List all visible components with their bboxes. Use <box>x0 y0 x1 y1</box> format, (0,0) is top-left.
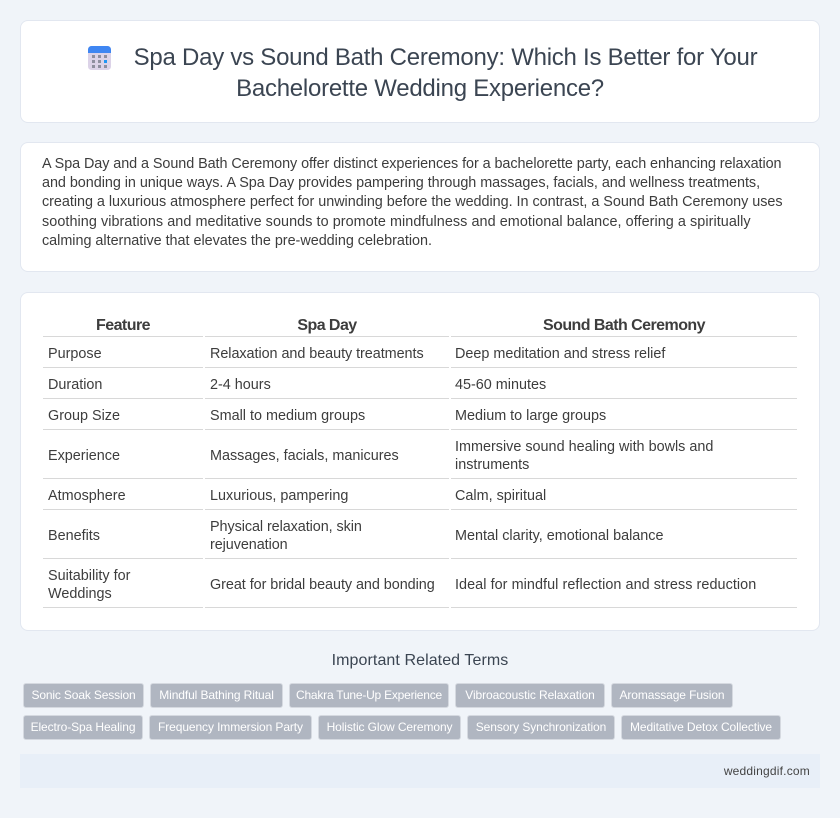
row: benefits: Benefits <box>48 528 100 544</box>
tag <box>23 683 144 708</box>
text block: introduction: and bonding in unique ways. A Spa Day provides pampering through massages, facials, and wellness treatments, <box>42 175 760 191</box>
text block: introduction <box>42 156 783 249</box>
row: group size: Group Size <box>48 408 120 424</box>
row: experience: Experience <box>48 448 120 464</box>
row: benefits: Mental clarity, emotional balance <box>455 528 664 544</box>
row: purpose: Purpose <box>48 346 102 362</box>
row: experience <box>48 439 713 473</box>
table header: Feature <box>96 317 150 334</box>
tag <box>318 715 461 740</box>
tag: Frequency Immersion Party <box>158 720 303 734</box>
row: atmosphere <box>48 488 546 504</box>
row: group size: Small to medium groups <box>210 408 365 424</box>
row: suitability for weddings: Suitability for <box>48 568 130 584</box>
row: group size: Medium to large groups <box>455 408 606 424</box>
row: atmosphere: Atmosphere <box>48 488 126 504</box>
heading: important related terms: Important Related Terms <box>332 652 508 669</box>
panel: title card <box>20 20 820 123</box>
table header: Sound Bath Ceremony <box>543 317 705 334</box>
tag: Sensory Synchronization <box>476 720 606 734</box>
row: duration: 45-60 minutes <box>455 377 546 393</box>
footer bar <box>20 754 820 788</box>
row: duration: Duration <box>48 377 102 393</box>
tag <box>611 683 733 708</box>
row: purpose: Deep meditation and stress relief <box>455 346 665 362</box>
row: suitability for weddings: Ideal for mindful reflection and stress reduction <box>455 577 756 593</box>
tag <box>150 683 283 708</box>
tag: Mindful Bathing Ritual <box>159 688 274 702</box>
row: benefits: Physical relaxation, skin <box>210 519 362 535</box>
title: Spa Day vs Sound Bath Ceremony: Which Is Better for Your <box>134 44 757 71</box>
row: purpose: Relaxation and beauty treatments <box>210 346 424 362</box>
row: benefits: rejuvenation <box>210 537 288 553</box>
tag <box>455 683 605 708</box>
row: atmosphere: Luxurious, pampering <box>210 488 348 504</box>
tag <box>289 683 449 708</box>
footer source: weddingdif.com <box>724 764 810 778</box>
text block: introduction: soothing vibrations and meditative sounds to promote mindfulness and emotional balance, offering a spiritually <box>42 214 751 230</box>
row: experience: Immersive sound healing with bowls and <box>455 439 713 455</box>
row: suitability for weddings <box>48 568 756 602</box>
table header: Spa Day <box>297 317 357 334</box>
tag <box>621 715 781 740</box>
title <box>134 44 758 102</box>
title: Bachelorette Wedding Experience? <box>236 74 604 102</box>
tag: Meditative Detox Collective <box>630 720 772 734</box>
row: suitability for weddings: Weddings <box>48 586 112 602</box>
tags: related terms <box>23 683 781 740</box>
tag: Sonic Soak Session <box>31 688 136 702</box>
icon: calendar <box>88 46 111 70</box>
tag: Holistic Glow Ceremony <box>327 720 452 734</box>
tag <box>467 715 615 740</box>
row: experience: instruments <box>455 457 529 473</box>
row: benefits <box>48 519 664 553</box>
tag: Chakra Tune-Up Experience <box>296 688 442 702</box>
panel: comparison table <box>20 292 820 631</box>
row: suitability for weddings: Great for bridal beauty and bonding <box>210 577 435 593</box>
text block: introduction: A Spa Day and a Sound Bath Ceremony offer distinct experiences for a bachelorette party, each enhancing relaxation <box>42 156 781 172</box>
text block: introduction: calming alternative that elevates the pre-wedding celebration. <box>42 233 432 249</box>
row: duration <box>48 377 546 393</box>
row: atmosphere: Calm, spiritual <box>455 488 546 504</box>
row: duration: 2-4 hours <box>210 377 271 393</box>
tag: Aromassage Fusion <box>619 688 725 702</box>
panel: introduction <box>20 142 820 272</box>
row: purpose <box>48 346 666 362</box>
tag: Vibroacoustic Relaxation <box>465 688 595 702</box>
row: group size <box>48 408 606 424</box>
tag <box>23 715 143 740</box>
tag <box>149 715 312 740</box>
tag: Electro-Spa Healing <box>31 720 135 734</box>
row: experience: Massages, facials, manicures <box>210 448 399 464</box>
table header <box>96 317 706 334</box>
text block: introduction: creating a luxurious atmosphere perfect for unwinding before the wedding. In contrast, a Sound Bath Ceremony uses <box>42 194 783 210</box>
